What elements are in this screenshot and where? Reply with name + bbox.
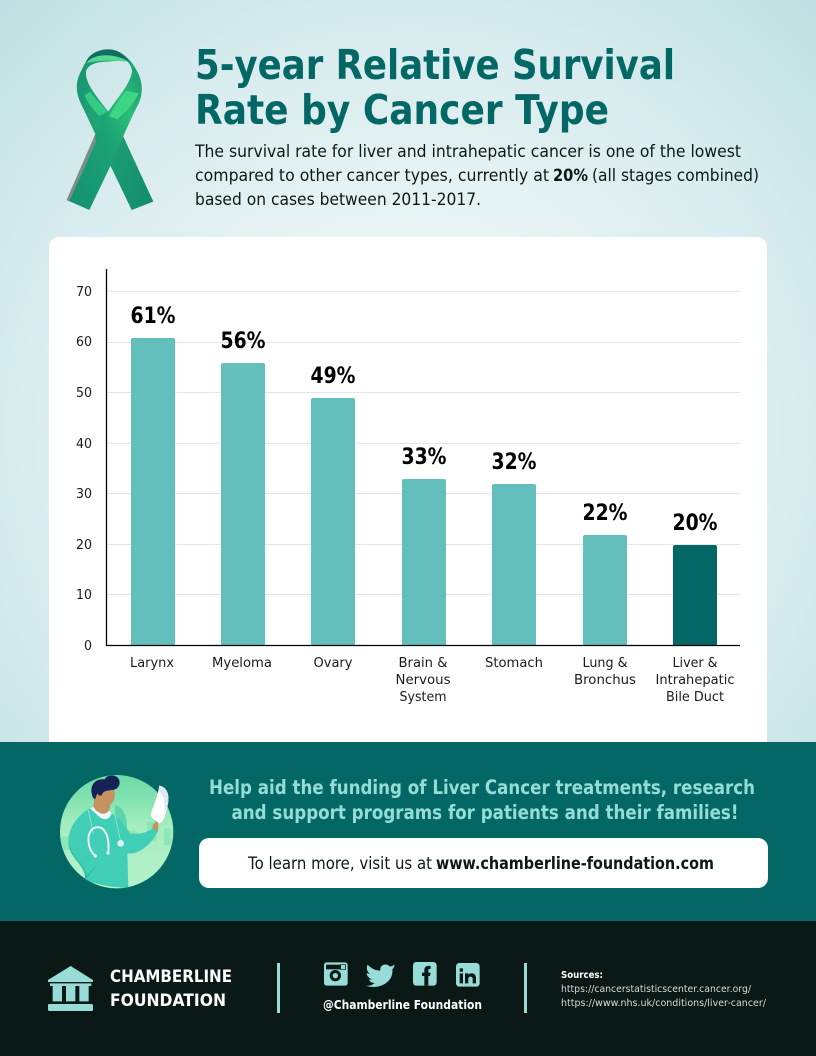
category labels: Bile Duct (666, 689, 724, 705)
bar chart (76, 269, 740, 705)
icon: facebook (413, 962, 437, 986)
value labels: 61% (130, 304, 176, 329)
call to action button: To learn more, visit us at (247, 854, 432, 873)
panel: chart card (49, 237, 767, 757)
icon: green awareness ribbon (67, 49, 153, 210)
call to action button: www.chamberline-foundation.com (436, 854, 714, 873)
callout heading: and support programs for patients and their families! (232, 801, 738, 824)
icon: foundation building (48, 966, 93, 1011)
intro paragraph: 20% (553, 166, 588, 186)
category labels: Liver & (672, 655, 718, 671)
category labels: Ovary (314, 655, 353, 671)
icon: instagram (324, 962, 348, 986)
category labels: Stomach (485, 655, 543, 671)
category labels: Lung & (582, 655, 628, 671)
category labels: Intrahepatic (656, 672, 734, 688)
sources (561, 970, 767, 1009)
category labels: System (400, 689, 446, 705)
sources: Sources: (561, 970, 603, 981)
y axis labels: 20 (76, 538, 92, 553)
y axis labels: 30 (76, 487, 92, 502)
title: Rate by Cancer Type (195, 86, 609, 134)
panel: call to action band (0, 742, 816, 921)
y axis labels: 0 (84, 639, 92, 654)
value labels: 49% (310, 364, 356, 389)
value labels: 33% (402, 445, 446, 470)
social icons (324, 962, 480, 987)
foundation name: CHAMBERLINE (110, 967, 232, 987)
title: 5-year Relative Survival (195, 41, 675, 89)
icon: doctor holding paper (60, 775, 173, 888)
category labels: Nervous (396, 672, 450, 688)
y axis labels: 70 (76, 285, 92, 300)
y axis labels: 10 (76, 588, 92, 603)
y axis labels: 50 (76, 386, 92, 401)
icon: linkedin (456, 963, 480, 987)
intro paragraph (194, 142, 759, 210)
intro paragraph: The survival rate for liver and intrahepatic cancer is one of the lowest (194, 142, 741, 162)
value labels: 20% (672, 511, 718, 536)
intro paragraph: (all stages combined) (592, 166, 759, 186)
category labels: Bronchus (574, 672, 636, 688)
y axis labels: 60 (76, 335, 92, 350)
social handle: @Chamberline Foundation (323, 998, 482, 1012)
category labels: Larynx (130, 655, 174, 671)
category labels: Myeloma (212, 655, 272, 671)
callout heading (209, 776, 755, 824)
call to action button (199, 838, 768, 888)
title (195, 41, 675, 134)
icon: twitter (366, 964, 395, 987)
y axis labels (76, 285, 92, 654)
foundation name: FOUNDATION (110, 991, 226, 1011)
foundation name (110, 967, 232, 1011)
panel: footer (0, 921, 816, 1056)
value labels: 32% (492, 450, 536, 475)
y axis labels: 40 (76, 437, 92, 452)
category labels (130, 655, 734, 705)
intro paragraph: compared to other cancer types, currently at (195, 166, 549, 186)
sources: https://cancerstatisticscenter.cancer.org/ (561, 984, 752, 995)
category labels: Brain & (398, 655, 448, 671)
bars (131, 338, 717, 645)
value labels (130, 304, 718, 536)
intro paragraph: based on cases between 2011-2017. (195, 190, 481, 210)
sources: https://www.nhs.uk/conditions/liver-cancer/ (561, 998, 767, 1009)
value labels: 22% (582, 501, 628, 526)
value labels: 56% (220, 329, 266, 354)
